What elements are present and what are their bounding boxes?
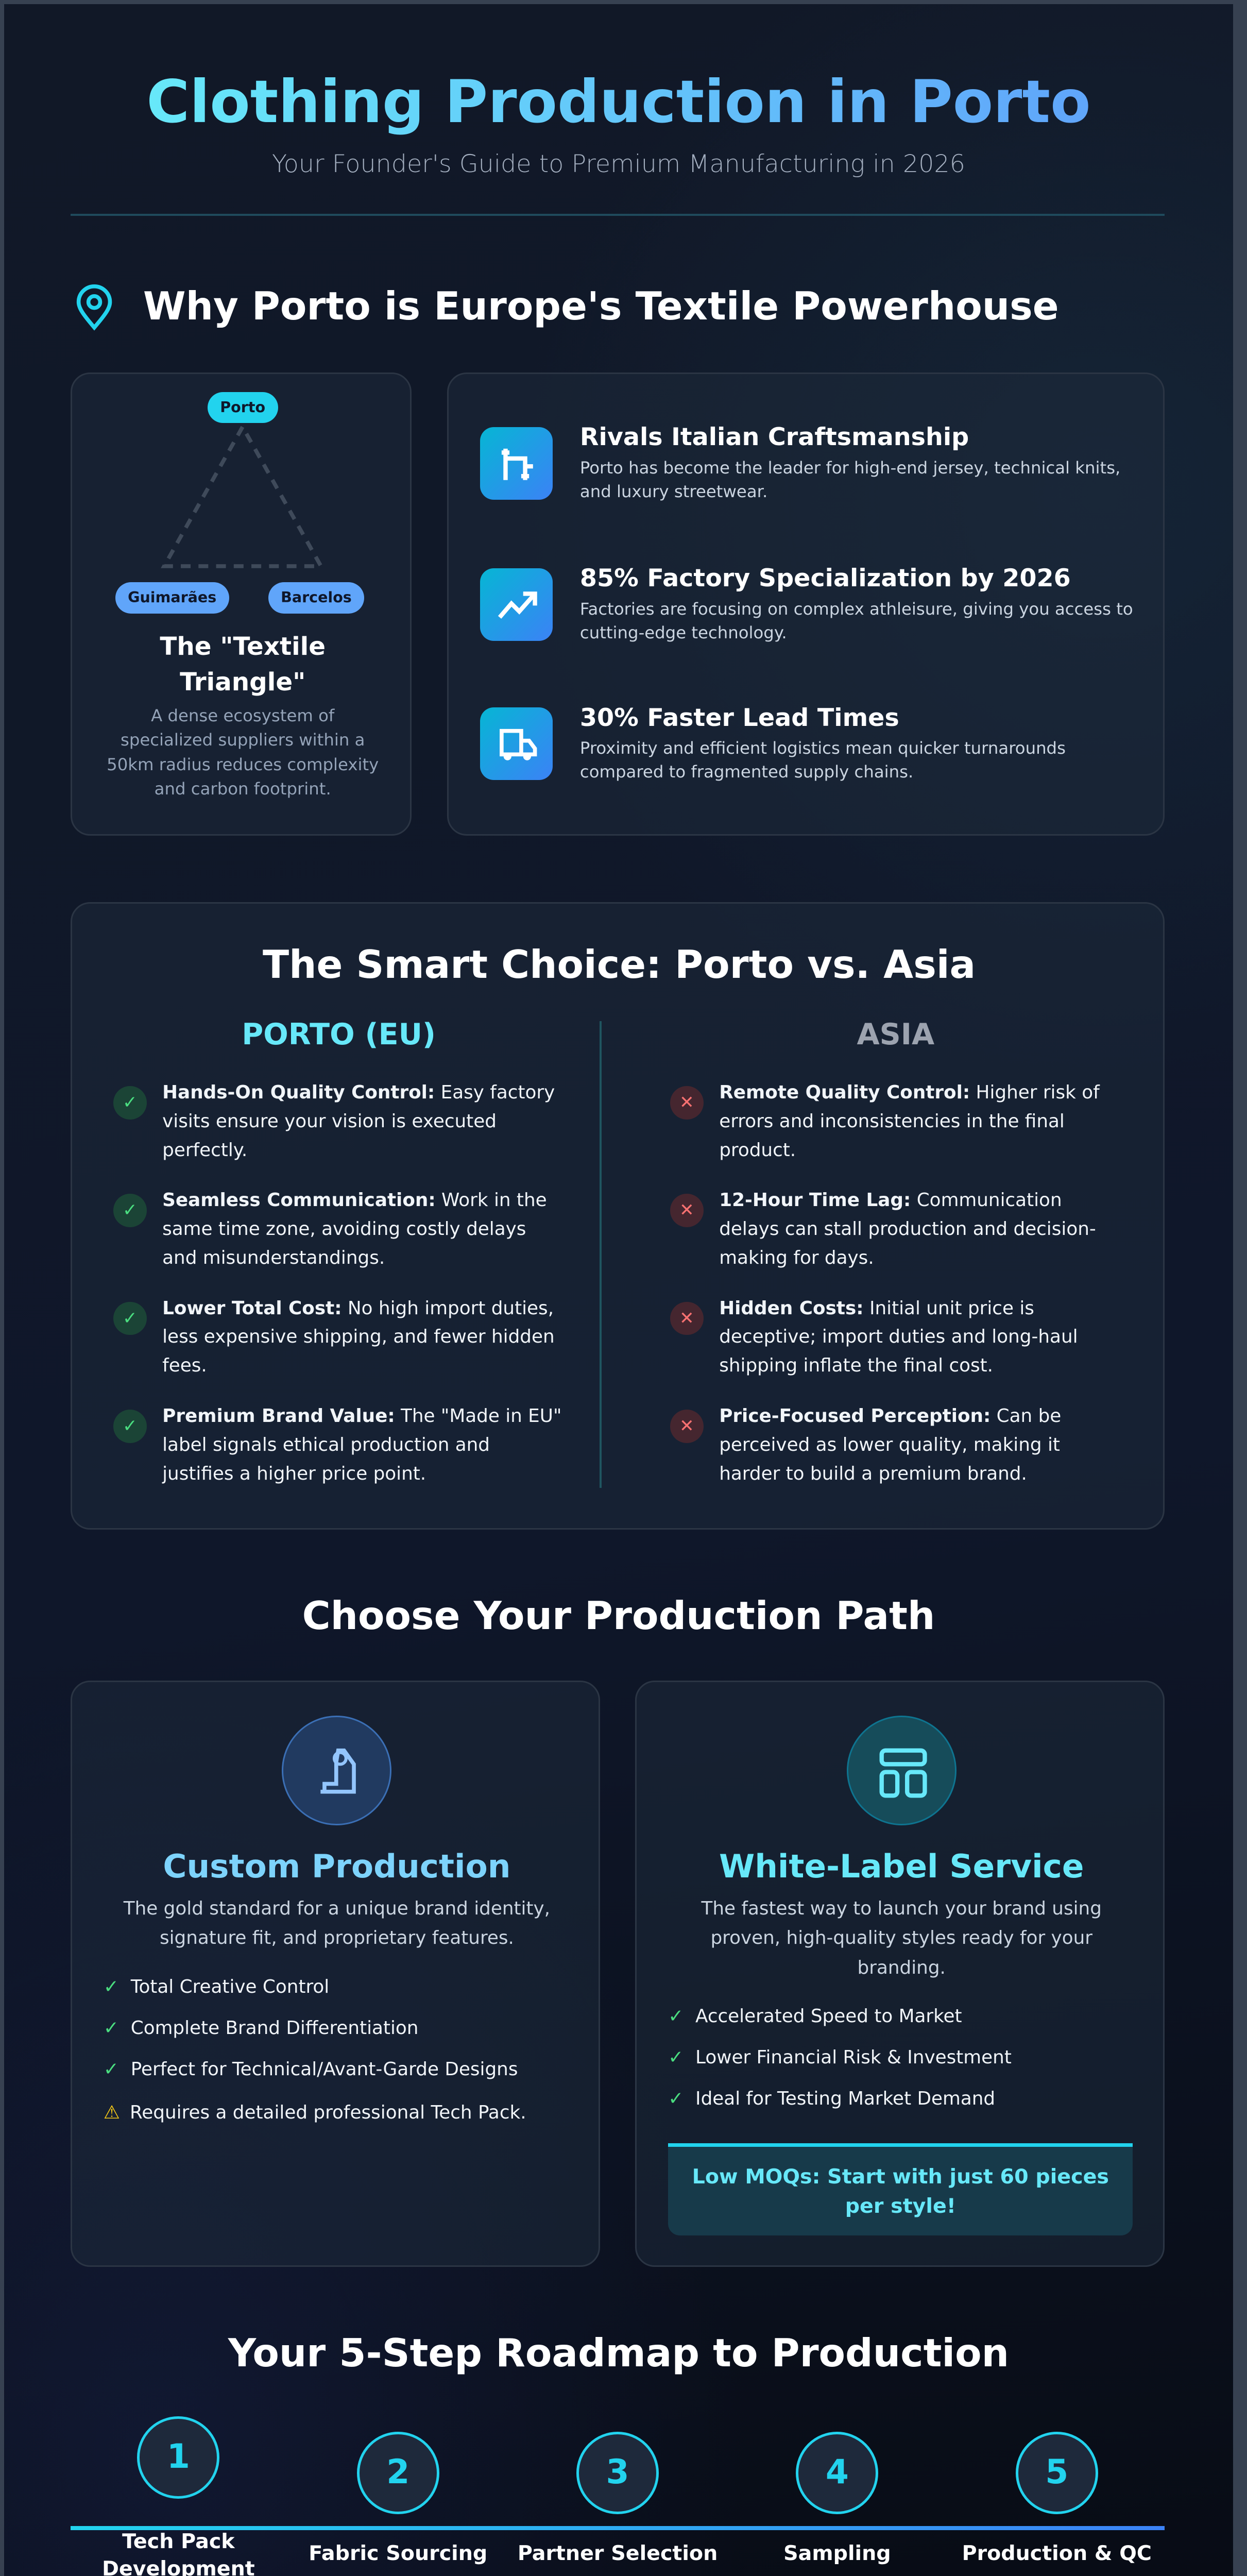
panel: porto advantages — [447, 372, 1165, 836]
panel: textile triangle — [71, 372, 412, 836]
item: faster lead times: compared to fragmented supply chains. — [580, 762, 913, 782]
column: asia: Price-Focused Perception: Can be — [719, 1405, 1061, 1427]
callout: low MOQs: Low MOQs: Start with just 60 pieces — [692, 2165, 1109, 2189]
pill: Porto — [208, 392, 278, 423]
step 3: Partner Selection — [518, 2541, 718, 2565]
triangle description: specialized suppliers within a — [121, 730, 365, 750]
panel: white-label: White-Label Service — [719, 1848, 1084, 1885]
white-label list: ✓ Lower Financial Risk & Investment — [668, 2047, 1012, 2068]
item: 85% specialization: cutting-edge technology. — [580, 623, 787, 642]
pill: Barcelos: Barcelos — [281, 589, 352, 606]
white-label list: ✓ Ideal for Testing Market Demand — [668, 2088, 995, 2109]
callout: low MOQs — [668, 2143, 1133, 2235]
column: porto: ✓ — [123, 1308, 138, 1329]
column: porto: and misunderstandings. — [162, 1247, 385, 1268]
column: porto: Hands-On Quality Control: Easy factory — [162, 1082, 555, 1103]
column: porto: same time zone, avoiding costly delays — [162, 1218, 526, 1240]
column: porto — [113, 1018, 561, 1484]
column: asia: making for days. — [719, 1247, 874, 1268]
triangle description: A dense ecosystem of — [151, 706, 334, 725]
column: asia: errors and inconsistencies in the final — [719, 1111, 1065, 1132]
item: faster lead times: Proximity and efficient logistics mean quicker turnarounds — [580, 738, 1066, 758]
icon: trend — [480, 568, 553, 641]
column: porto: visits ensure your vision is executed — [162, 1111, 497, 1132]
column: asia: ✕ — [679, 1200, 694, 1221]
step 1 — [69, 2416, 288, 2576]
step 4: 4 — [826, 2453, 849, 2492]
triangle heading: The "Textile — [160, 632, 326, 661]
column: asia: deceptive; import duties and long-haul — [719, 1326, 1078, 1347]
panel: white-label: The fastest way to launch your brand using — [702, 1898, 1102, 1919]
column: porto: perfectly. — [162, 1140, 247, 1161]
heading: roadmap: Your 5-Step Roadmap to Production — [228, 2330, 1009, 2376]
panel: white-label: proven, high-quality styles ready for your — [710, 1927, 1092, 1948]
icon: ruler — [480, 427, 553, 500]
column: asia: 12-Hour Time Lag: Communication — [719, 1190, 1062, 1211]
icon: map pin — [76, 284, 112, 331]
item: 85% specialization — [480, 564, 1133, 642]
item: rivals italian — [480, 423, 1120, 501]
column: porto: Premium Brand Value: The "Made in EU" — [162, 1405, 561, 1427]
panel: custom production — [71, 1681, 600, 2267]
column: asia: ASIA — [857, 1018, 934, 1052]
panel: custom production: Custom Production — [163, 1848, 510, 1885]
step 5: Production & QC — [962, 2541, 1152, 2565]
step 2: 2 — [386, 2453, 409, 2492]
pill: Barcelos — [268, 582, 364, 614]
section heading: why porto: Why Porto is Europe's Textile Powerhouse — [143, 283, 1059, 329]
custom list: ⚠ Requires a detailed professional Tech Pack. — [104, 2102, 526, 2123]
column: porto: justifies a higher price point. — [162, 1463, 426, 1484]
column: asia: shipping inflate the final cost. — [719, 1355, 993, 1376]
custom list: ✓ Total Creative Control — [104, 1976, 329, 1997]
column: porto: PORTO (EU) — [242, 1018, 436, 1052]
column: porto: ✓ — [123, 1092, 138, 1113]
panel: white-label: branding. — [858, 1957, 946, 1978]
item: 85% specialization: Factories are focusing on complex athleisure, giving you access to — [580, 599, 1133, 619]
column: asia: ✕ — [679, 1092, 694, 1113]
custom list: ✓ Complete Brand Differentiation — [104, 2018, 418, 2039]
column: asia — [670, 1018, 1100, 1484]
column: asia: delays can stall production and decision- — [719, 1218, 1096, 1240]
icon: layout circle — [847, 1716, 956, 1825]
pill: Porto: Porto — [220, 399, 265, 415]
column: asia: perceived as lower quality, making it — [719, 1434, 1060, 1455]
pill: Guimarães — [115, 582, 229, 614]
column: asia: ✕ — [679, 1308, 694, 1329]
column: porto: Lower Total Cost: No high import duties, — [162, 1298, 554, 1319]
custom list: ✓ Perfect for Technical/Avant-Garde Designs — [104, 2059, 518, 2080]
step 3 — [508, 2432, 727, 2576]
panel: custom production: The gold standard for a unique brand identity, — [124, 1898, 550, 1919]
item: 85% specialization: 85% Factory Specialization by 2026 — [580, 564, 1071, 592]
panel: porto vs asia — [71, 902, 1165, 1530]
column: asia: Hidden Costs: Initial unit price is — [719, 1298, 1034, 1319]
white-label list — [668, 2006, 1012, 2109]
column: porto: Seamless Communication: Work in the — [162, 1190, 547, 1211]
item: faster lead times — [480, 704, 1066, 782]
step 4 — [727, 2432, 947, 2576]
triangle heading — [160, 632, 326, 697]
heading: production path: Choose Your Production Path — [302, 1593, 935, 1638]
icon: truck — [480, 707, 553, 780]
step 2: Fabric Sourcing — [309, 2541, 487, 2565]
icon: tag circle — [282, 1716, 391, 1825]
triangle diagram — [161, 426, 322, 568]
column: asia: Remote Quality Control: Higher risk of — [719, 1082, 1100, 1103]
column: porto: ✓ — [123, 1416, 138, 1436]
triangle description — [107, 706, 379, 799]
item: faster lead times: 30% Faster Lead Times — [580, 704, 899, 732]
step 3: 3 — [606, 2453, 629, 2492]
roadmap timeline — [71, 2416, 1165, 2576]
item: rivals italian: and luxury streetwear. — [580, 482, 767, 501]
subtitle: Your Founder's Guide to Premium Manufacturing in 2026 — [272, 150, 965, 178]
callout: low MOQs: per style! — [845, 2194, 956, 2218]
comparison heading: The Smart Choice: Porto vs. Asia — [263, 942, 976, 987]
column: asia: harder to build a premium brand. — [719, 1463, 1027, 1484]
title: Clothing Production in Porto — [146, 67, 1091, 136]
column: porto: ✓ — [123, 1200, 138, 1221]
column: asia: product. — [719, 1140, 796, 1161]
panel: white-label — [635, 1681, 1165, 2267]
pill: Guimarães: Guimarães — [128, 589, 216, 606]
step 2 — [288, 2432, 508, 2576]
item: rivals italian: Rivals Italian Craftsmanship — [580, 423, 969, 451]
step 5 — [947, 2432, 1167, 2576]
column: porto: fees. — [162, 1355, 207, 1376]
column: asia: ✕ — [679, 1416, 694, 1436]
step 5: 5 — [1045, 2453, 1068, 2492]
triangle description: and carbon footprint. — [155, 779, 331, 799]
white-label list: ✓ Accelerated Speed to Market — [668, 2006, 962, 2027]
triangle heading: Triangle" — [180, 668, 305, 697]
column: porto: less expensive shipping, and fewer hidden — [162, 1326, 555, 1347]
step 1: Tech Pack — [122, 2530, 235, 2553]
custom list — [104, 1976, 526, 2123]
step 1: 1 — [167, 2437, 190, 2476]
item: rivals italian: Porto has become the leader for high-end jersey, technical knits, — [580, 458, 1120, 478]
panel: custom production: signature fit, and proprietary features. — [160, 1927, 514, 1948]
triangle description: 50km radius reduces complexity — [107, 755, 379, 774]
step 4: Sampling — [783, 2541, 891, 2565]
column: porto: label signals ethical production and — [162, 1434, 490, 1455]
